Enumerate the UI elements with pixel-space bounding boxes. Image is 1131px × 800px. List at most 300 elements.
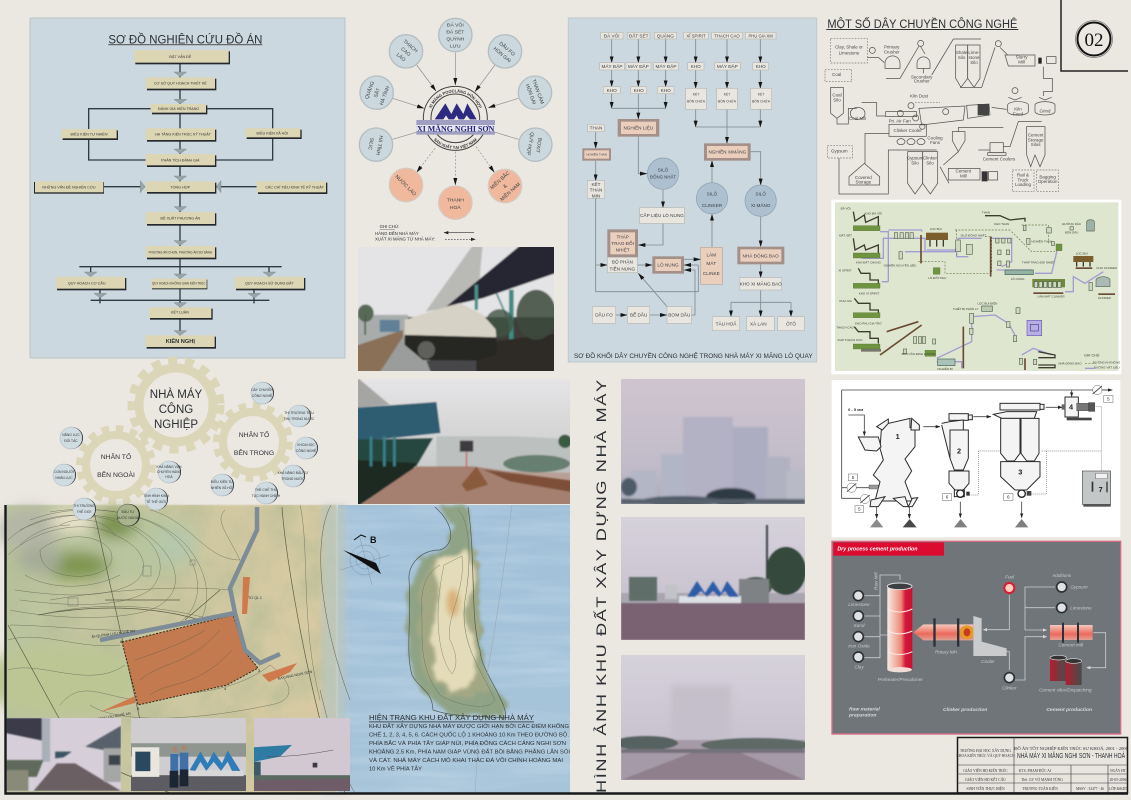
raw material nodes: Clay — [854, 664, 864, 669]
additions nodes: Additions — [1051, 573, 1072, 578]
row of storage boxes: KÉT — [724, 92, 730, 97]
project name: ĐỒ ÁN TỐT NGHIỆP KIẾN TRÚC SƯ KHOÁ, 2001 - 2006 — [1014, 746, 1129, 752]
heading: research diagram: SƠ ĐỒ NGHIÊN CỨU ĐỒ ÁN — [108, 31, 262, 46]
hub: đá vôi: QUỲNH — [446, 36, 465, 43]
bubble: khả năng đầu tư: KHẢ NĂNG ĐẦU TƯ — [278, 470, 309, 475]
gear: nhân tố bên trong — [217, 406, 289, 478]
box: tháp trao đổi nhiệt: TRAO ĐỔI — [611, 240, 634, 246]
cement silos: Cement silos/Dispatching — [1039, 688, 1092, 693]
box: hạ tầng kiến trúc — [146, 128, 216, 142]
silo: clinker: CLINKER — [702, 203, 723, 208]
flow sheet labels: THIẾT BỊ PHÂN LY — [953, 306, 978, 311]
bubble: khả năng vận chuyển: CHUYỂN HÀNG — [157, 469, 182, 474]
process lines and equipment: Grind — [1040, 109, 1051, 114]
panel: technology line process drawing — [825, 16, 1058, 194]
staff rows: LỚP 46KD5 — [1109, 786, 1127, 791]
hub: than cám hòn gai: THAN CÁM — [530, 78, 546, 105]
brown conveyor structures — [853, 212, 1025, 370]
row of storage boxes: KHO — [607, 88, 617, 93]
box: cơ sở quy hoạch: CƠ SỞ QUY HOẠCH THIẾT KẾ — [154, 81, 207, 86]
raw material nodes: Raw Mill — [874, 571, 879, 590]
green stockpiles — [853, 226, 1062, 356]
cooler: Cooler — [981, 659, 995, 664]
staff rows: TRƯƠNG TUẤN KIÊN — [1022, 786, 1058, 791]
bubble: khả năng đầu tư: TRONG NƯỚC — [281, 476, 305, 481]
text block: site description: 10 Km VỀ PHÍA TÂY — [369, 766, 422, 772]
stage labels: Raw material — [849, 707, 880, 713]
gear: nhà máy công nghiệp — [132, 361, 220, 449]
box: điều kiện tự nhiên: ĐIỀU KIỆN TỰ NHIÊN — [71, 131, 108, 136]
row of crusher boxes: KHO — [756, 64, 766, 69]
box: nghiền than — [582, 148, 611, 161]
text block: site description: PHÍA BẮC VÀ PHÍA TÂY GIÁP NÚI, PHÍA ĐÔNG CÁCH CẢNG NGHI SƠN — [369, 739, 566, 747]
row of raw material boxes: QUẶNG — [657, 32, 674, 38]
box: hạ tầng kiến trúc: HẠ TẦNG KIẾN TRÚC KỸ THUẬT — [155, 132, 212, 137]
flow lines — [596, 39, 791, 317]
map arrows and labels: TỪ QL 1 — [248, 595, 262, 600]
box: quy hoạch không gian: QUY HOẠCH KHÔNG GIAN KIẾN TRÚC — [152, 281, 206, 286]
row of raw material boxes: ĐÁ VÔI — [604, 32, 620, 38]
box: nhà đóng bao — [737, 247, 784, 264]
process lines and equipment: Silo — [970, 60, 978, 65]
photo: foggy road — [621, 655, 805, 780]
process lines and equipment: Clinker — [923, 155, 937, 160]
gear: nhà máy công nghiệp: NGHIỆP — [154, 418, 198, 431]
process lines and equipment: Storage — [1028, 137, 1044, 142]
staff rows: ThS. GV VÕ MẠNH TÙNG — [1021, 777, 1063, 782]
process lines and equipment: Cooling — [927, 135, 943, 140]
staff rows: NGÀY HT — [1110, 768, 1127, 773]
box: quy hoạch sử dụng đất — [235, 277, 305, 290]
row of raw material boxes: THẠCH CAO — [714, 33, 740, 38]
text block: site description: KHOẢNG 2.5 Km, PHÍA NAM GIÁP VÙNG ĐẤT BỒI BẰNG PHẲNG LẪN SỎI — [369, 748, 570, 756]
additions nodes: Gypsum — [1070, 585, 1088, 590]
panel: dry process cement production — [832, 541, 1121, 734]
legend: HÀNG ĐẾN NHÀ MÁY — [375, 231, 419, 236]
sheet number box: 02 — [1084, 30, 1104, 51]
box: tàu hoả: TÀU HOẢ — [716, 320, 737, 326]
equipment 7: control panel — [1082, 471, 1111, 507]
valve callouts: 6 — [1007, 495, 1010, 500]
row of crusher boxes: KHO — [691, 64, 701, 69]
flow sheet labels: THAN — [982, 210, 990, 214]
process lines and equipment: Coal — [832, 93, 842, 98]
gear: nhân tố bên trong: NHÂN TỐ — [239, 429, 269, 439]
bubble: đầu tư nước ngoài: ĐẦU TƯ — [122, 510, 135, 514]
photo: factory road with canopy — [358, 379, 570, 504]
box: các chỉ tiêu kinh tế: CÁC CHỈ TIÊU KINH TẾ KỸ THUẬT — [265, 184, 325, 189]
staff rows: GIÁO VIÊN HD KIẾN TRÚC — [963, 768, 1008, 773]
bubble: năng lực đối tác: NĂNG LỰC — [62, 433, 80, 437]
box: đánh giá hiện trạng — [151, 104, 207, 114]
bubble: dây chuyền công nghệ: CÔNG NGHỆ — [252, 393, 273, 398]
box: bộ phận tiền nung — [607, 257, 637, 273]
bubble: điều kiện tự nhiên xã hội — [211, 474, 234, 496]
fuel node — [1004, 575, 1015, 593]
process lines and equipment: Mill — [960, 173, 967, 178]
box: dầu fo: DẦU FO — [595, 312, 613, 318]
row of raw material boxes — [601, 32, 776, 39]
box: tàu hoả — [712, 317, 740, 331]
equipment 2: cyclone — [942, 414, 972, 497]
piping lines — [842, 390, 1112, 518]
piles of material — [870, 519, 1028, 527]
photo: truck loaded with cement bags — [358, 247, 554, 371]
hub: quặng sắt hà tĩnh: QUẶNG — [363, 80, 376, 100]
photo strip: logo wall with two people — [131, 718, 246, 791]
process lines and equipment — [825, 39, 1058, 194]
flow sheet labels: LÒ NUNG — [1011, 276, 1025, 281]
gear: nhân tố bên trong: BÊN TRONG — [234, 448, 274, 457]
process lines and equipment: Clinker Cooler — [893, 128, 922, 133]
cooler — [973, 616, 1007, 664]
bubble: tình hình kinh tế: TÌNH HÌNH KINH — [143, 494, 169, 498]
logo: xi măng nghi sơn: XI MĂNG POOCLĂNG HỖN HỢP — [428, 89, 482, 108]
bubble: điều kiện tự nhiên xã hội: ĐIỀU KIỆN TỰ — [211, 479, 233, 484]
process lines and equipment: Cement — [1028, 133, 1044, 138]
box: bộ phận tiền nung: TIỀN NUNG — [610, 265, 636, 271]
row of storage boxes: KHO — [661, 88, 671, 93]
row of crusher boxes: MÁY ĐẬP — [628, 63, 649, 69]
box: điều kiện xã hội: ĐIỀU KIỆN XÃ HỘI — [256, 130, 288, 135]
factory site polygon — [122, 615, 258, 705]
box: cơ sở quy hoạch — [146, 77, 216, 90]
box: quy hoạch cơ cấu — [56, 277, 126, 290]
hub: hà tĩnh silic — [359, 128, 393, 161]
box: kết luận — [149, 307, 213, 320]
box: bơm dầu — [667, 307, 691, 323]
process lines and equipment: Secondary — [911, 74, 933, 79]
logo: xi măng nghi sơn — [416, 86, 495, 151]
box: tháp trao đổi nhiệt: THÁP — [616, 233, 629, 239]
bubble: tình hình kinh tế — [143, 488, 169, 510]
flow sheet labels: LÒ ĐỐT PHỤ — [928, 275, 946, 280]
purple conveyor lines — [862, 230, 1103, 368]
preheater tower: Preheater/Precalciner — [878, 677, 923, 682]
box: lò nung: LÒ NUNG — [657, 262, 679, 268]
process lines and equipment: Silo — [833, 98, 841, 103]
equipment 1: dryer: 1 — [896, 432, 900, 441]
process lines and equipment: Shale — [956, 50, 968, 55]
island — [408, 506, 510, 718]
mountain terrain — [0, 508, 200, 715]
bubble: con người nhân lực — [53, 464, 76, 486]
row of storage boxes: BỒN CHỨA — [752, 99, 771, 104]
box: nhà đóng bao: NHÀ ĐÓNG BAO — [743, 252, 779, 258]
flow sheet labels: LÀM MÁT CLINKER — [1038, 295, 1065, 299]
row of crusher boxes: MÁY ĐẬP — [602, 63, 622, 69]
school name — [956, 748, 1015, 758]
rotary kiln: Rotary kiln — [935, 649, 957, 654]
row of raw material boxes: PHỤ GIA XM — [749, 33, 773, 38]
legend: GHI CHÚ: — [380, 224, 399, 229]
bubble: thể chế thủ tục: THỂ CHẾ THỦ — [255, 487, 278, 492]
box: quy hoạch sử dụng đất: QUY HOẠCH SỬ DỤNG ĐẤT — [245, 280, 294, 285]
box: làm mát clinke — [701, 247, 722, 284]
bubble: khả năng vận chuyển — [157, 461, 182, 483]
preheater tower — [878, 583, 923, 682]
flow sheet labels: KHO THAN — [994, 222, 1009, 226]
row of storage boxes — [603, 87, 772, 109]
process lines and equipment: Slurry — [1016, 55, 1028, 60]
flow sheet labels: SILÔ ĐỒNG NHẤT — [961, 233, 986, 238]
process lines and equipment: Gypsum — [831, 148, 848, 153]
bubble: thị trường thế giới: THỊ TRƯỜNG — [73, 503, 95, 508]
box: đặt vấn đề: ĐẶT VẤN ĐỀ — [169, 54, 192, 59]
gear: nhân tố bên ngoài: NHÂN TỐ — [101, 451, 131, 461]
staff rows: SINH VIÊN THỰC HIỆN — [966, 786, 1005, 791]
row of raw material boxes: ĐẤT SÉT — [629, 32, 649, 38]
equipment 1: dryer — [858, 418, 919, 507]
flow sheet labels: BỒN DẦU — [1065, 229, 1078, 234]
box: tổng hợp: TỔNG HỢP — [170, 184, 191, 189]
box: kết than mịn: THAN — [590, 188, 602, 193]
bubble: thị trường tiêu thụ: THỤ TRONG NƯỚC — [284, 416, 315, 421]
equipment 7: control panel: 7 — [1099, 485, 1103, 494]
bubble: năng lực đối tác: ĐỐI TÁC — [64, 438, 78, 443]
equipment 4: fan: 4 — [1069, 403, 1074, 412]
process lines and equipment: Lime- — [968, 50, 980, 55]
hub: đá vôi: ĐÁ VÔI — [447, 22, 464, 29]
box: làm mát clinke: LÀM — [707, 251, 716, 257]
logo: xi măng nghi sơn: XI MĂNG NGHI SƠN — [417, 124, 494, 134]
road — [100, 507, 280, 663]
box: nghiền liệu: NGHIỀN LIỆU — [623, 123, 653, 130]
box: làm mát clinke: CLINKE — [703, 271, 720, 276]
staff rows: 20-05-2006 — [1110, 778, 1127, 782]
process lines and equipment: Clay, Shale or — [835, 45, 863, 50]
logo: xi măng nghi sơn: SẢN XUẤT TẠI VIỆT NAM — [434, 138, 477, 150]
dashed air lines — [918, 225, 1055, 273]
box: phân tích đánh giá: PHÂN TÍCH ĐÁNH GIÁ — [161, 157, 200, 162]
hub: đá vôi: LƯU — [450, 44, 461, 50]
valve callouts — [847, 385, 1113, 512]
box: dầu fo — [592, 307, 616, 323]
process lines and equipment: Pri. Air Fan — [889, 118, 911, 123]
box: đánh giá hiện trạng: ĐÁNH GIÁ HIỆN TRẠNG — [158, 106, 199, 111]
stage labels: Cement production — [1046, 707, 1092, 713]
box: than: THAN — [590, 126, 602, 131]
box: quy hoạch không gian — [151, 279, 207, 289]
box: nghiền than: NGHIỀN THAN — [586, 152, 607, 157]
hub: dầu fo hòn gai — [488, 35, 522, 68]
box: xà lan: XÀ LAN — [750, 320, 767, 326]
hub: than cám hòn gai — [518, 76, 552, 109]
map arrows and labels: RA CẢNG NGHI SƠN — [277, 669, 313, 681]
raw material nodes: Limestone — [848, 602, 870, 607]
hub: nước lào: NƯỚC LÀO — [394, 173, 418, 197]
hub: boxit quỳ hợp: QUỲ HỢP — [525, 132, 536, 157]
equipment 3: bag filter: 3 — [1018, 467, 1022, 476]
box: bể dầu: BỂ DẦU — [630, 312, 647, 318]
bubble: thị trường thế giới: THẾ GIỚI — [77, 509, 91, 514]
box: nghiền liệu — [618, 119, 659, 137]
box: tháp trao đổi nhiệt — [607, 229, 638, 257]
hub: thanh hoá — [439, 186, 472, 219]
gear: nhà máy công nghiệp: NHÀ MÁY — [150, 388, 203, 401]
hub: thạch cao lào: THẠCH — [402, 39, 419, 55]
flow sheet labels: KHO CLINKER — [1097, 266, 1118, 270]
bubble: dây chuyền công nghệ — [251, 382, 274, 404]
hub: than cám hòn gai: HÒN GAI — [524, 83, 538, 105]
hub: dầu fo hòn gai: HÒN GAI — [492, 45, 512, 64]
hub: thanh hoá: THANH — [447, 198, 464, 204]
flow sheet labels: KHO XỈ SPIRIT — [859, 290, 879, 295]
bubble: khoa học công nghệ — [295, 437, 318, 459]
sheet border — [6, 505, 1128, 794]
caption: SƠ ĐỒ KHỐI DÂY CHUYỀN CÔNG NGHỆ TRONG NHÀ MÁY XI MĂNG LÒ QUAY — [574, 350, 813, 360]
bubble: con người nhân lực: NHÂN LỰC — [55, 476, 73, 480]
equipment 2: cyclone: 2 — [957, 447, 961, 456]
hub: thanh hoá: HOÁ — [450, 204, 461, 211]
staff rows: KTS. PHẠM ĐỨC AI — [1019, 768, 1052, 773]
box: các chỉ tiêu kinh tế — [257, 181, 327, 194]
land — [6, 505, 346, 793]
box: làm mát clinke: MÁT — [706, 260, 716, 266]
flow sheet labels: LỌC BỤI — [1076, 251, 1088, 255]
box: bơm dầu: BƠM DẦU — [668, 312, 690, 318]
flow sheet labels: PHỤ GIA — [840, 299, 852, 303]
box: nghiền xi măng — [704, 143, 751, 161]
box: phương án chọn: PHƯƠNG ÁN CHỌN, PHƯƠNG ÁN SO SÁNH — [149, 250, 212, 254]
equipment 4: fan — [1062, 397, 1095, 420]
process lines and equipment: Operation — [1038, 179, 1058, 184]
bubble: khả năng vận chuyển: KHẢ NĂNG VẬN — [157, 464, 182, 469]
text block: site description: VÀ CÁT. NHÀ MÁY CÁCH MỎ KHAI THÁC ĐÁ VÔI CHÍNH HOÀNG MAI — [369, 757, 563, 764]
box: đề xuất phương án: ĐỀ XUẤT PHƯƠNG ÁN — [160, 215, 201, 220]
legend — [375, 224, 475, 242]
process lines and equipment: Silos — [1031, 142, 1041, 147]
bubble: thị trường thế giới — [73, 498, 96, 520]
hub: đá vôi — [439, 18, 472, 52]
flowchart connectors — [79, 63, 282, 343]
hub: hà tĩnh silic: SILIC — [366, 137, 374, 151]
box: kết than mịn: KẾT — [591, 181, 601, 187]
red header — [833, 542, 944, 556]
bubble: đầu tư nước ngoài: NƯỚC NGOÀI — [117, 515, 139, 520]
flow sheet labels: BAN CÂN ĐỊNH LƯỢNG — [902, 352, 936, 356]
gear: nhân tố bên ngoài: BÊN NGOÀI — [97, 470, 135, 479]
staff rows: MSSV : 33477 - 46 — [1076, 787, 1104, 791]
text block: site description: KHU ĐẤT XÂY DỰNG NHÀ MÁY ĐƯỢC GIỚI HẠN BỞI CÁC ĐIỂM KHỐNG — [369, 723, 569, 730]
stage labels — [848, 707, 1092, 718]
box: những vấn đề nghiên cứu: NHỮNG VẤN ĐỀ NGHIÊN CỨU — [42, 184, 96, 189]
valve callouts: 5 — [1107, 397, 1110, 402]
process lines and equipment: Kiln — [1014, 107, 1022, 112]
box: bể dầu — [627, 307, 650, 323]
additions nodes — [1051, 573, 1092, 613]
bubble: điều kiện tự nhiên xã hội: NHIÊN XÃ HỘI — [211, 485, 233, 490]
process lines and equipment: Cement — [955, 169, 972, 174]
rotary kiln — [913, 618, 974, 654]
box: cấp liệu lò nung: CẤP LIỆU LÒ NUNG — [640, 211, 684, 218]
panel: cement line block diagram — [568, 18, 817, 362]
gear: nhân tố bên ngoài — [80, 429, 152, 501]
map arrows and labels: 6 — [120, 639, 123, 644]
panel: grinding flow diagram (white) — [832, 380, 1120, 537]
text block: site description: CHẾ 1, 2, 3, 4, 5, 6. CÁCH QUỐC LỘ 1 KHOẢNG 10 Km THEO ĐƯỜNG BỘ. — [369, 732, 569, 738]
process lines and equipment: Gypsum — [907, 155, 924, 160]
hub: miền bắc miền nam: & — [502, 183, 509, 190]
factor bubbles around gears — [53, 382, 318, 526]
box: những vấn đề nghiên cứu — [34, 181, 104, 194]
flow sheet labels: KHO ĐÁ VÔI — [865, 210, 882, 215]
box: kết than mịn — [587, 181, 605, 198]
flow sheet labels: LỌC BỤI ĐIỆN — [977, 300, 997, 305]
text block: site description: HIỆN TRẠNG KHU ĐẤT XÂY DỰNG NHÀ MÁY — [369, 712, 534, 722]
stage labels: preparation — [848, 712, 876, 718]
hub: thạch cao lào — [389, 35, 423, 68]
box: bộ phận tiền nung: BỘ PHẬN — [612, 259, 633, 265]
row of crusher boxes — [600, 63, 769, 70]
box: ôtô — [778, 317, 804, 331]
clinker node: Clinker — [1002, 685, 1017, 690]
cement mill: Cement mill — [1058, 642, 1084, 647]
photo: entrance with logo — [621, 517, 805, 640]
bubble: năng lực đối tác — [60, 427, 83, 449]
row of storage boxes: BỒN CHỨA — [718, 99, 737, 104]
photo strip: right canopy — [254, 718, 350, 791]
box: điều kiện xã hội — [245, 128, 302, 139]
hub: hà tĩnh silic: HÀ TĨNH — [374, 135, 385, 156]
flow sheet labels: THẠCH CAO — [836, 325, 854, 329]
hub: dầu fo hòn gai: DẦU FO — [498, 40, 517, 58]
row of storage boxes: KÉT — [758, 92, 764, 97]
process lines and equipment: Storage — [855, 179, 872, 184]
contour lines — [8, 505, 355, 793]
vertical heading: site photographs: HÌNH ẢNH KHU ĐẤT XÂY DỰNG NHÀ MÁY — [593, 380, 609, 793]
raw material nodes — [848, 571, 879, 669]
hub: nước lào — [389, 168, 423, 202]
connector lines — [864, 575, 1106, 680]
bubble: con người nhân lực: CON NGƯỜI — [54, 469, 74, 474]
staff rows: GIÁO VIÊN HD KẾT CẤU — [965, 777, 1006, 782]
box: ôtô: ÔTÔ — [786, 320, 796, 326]
hub: quặng sắt hà tĩnh: HÀ TĨNH — [378, 85, 391, 106]
fuel node: Fuel — [1005, 575, 1015, 580]
panel: site map with sea — [0, 505, 570, 793]
flow sheet labels: GHI CHÚ — [1084, 352, 1100, 357]
valve callouts: 6 — [946, 495, 949, 500]
map arrows and labels: ĐI QUỲNH LƯU NGHỆ AN — [91, 628, 136, 639]
flow sheet labels: ĐƯỜNG VẬT LIỆU — [1094, 365, 1120, 370]
title block — [956, 737, 1129, 793]
silo: clinker: SILÔ — [707, 191, 718, 197]
silo: đồng nhất — [647, 158, 679, 189]
photo strip: left entrance — [6, 718, 121, 791]
box: tổng hợp — [146, 181, 216, 194]
bubble: thị trường tiêu thụ — [284, 405, 315, 427]
flow sheet labels: NGHIỀN BI — [937, 366, 953, 371]
school name: KHOA KIẾN TRÚC VÀ QUY HOẠCH — [956, 753, 1015, 758]
flow sheet labels: NHÀ ĐÓNG BAO — [1058, 360, 1082, 365]
map arrows and labels: 3 — [258, 668, 261, 673]
map arrows and labels: 5 — [137, 706, 140, 711]
equipment 3: bag filter — [993, 403, 1044, 497]
box: quy hoạch cơ cấu: QUY HOẠCH CƠ CẤU — [68, 281, 106, 285]
flow sheet labels: LỌC BỤI — [930, 227, 942, 231]
raw material nodes: Sand — [854, 623, 865, 628]
box: điều kiện tự nhiên — [61, 129, 118, 140]
process lines and equipment: Silo — [958, 55, 966, 60]
process lines and equipment: stone — [969, 55, 980, 60]
flow sheet labels — [836, 206, 1121, 371]
bubble: tình hình kinh tế: TẾ THẾ GIỚI — [146, 499, 166, 504]
cement mill — [1050, 623, 1093, 647]
factory gears with factors — [80, 361, 289, 501]
flow sheet labels: ĐƯỜNG KHÍ NÓNG — [1093, 360, 1121, 365]
box: kho xi măng bao — [739, 278, 782, 290]
